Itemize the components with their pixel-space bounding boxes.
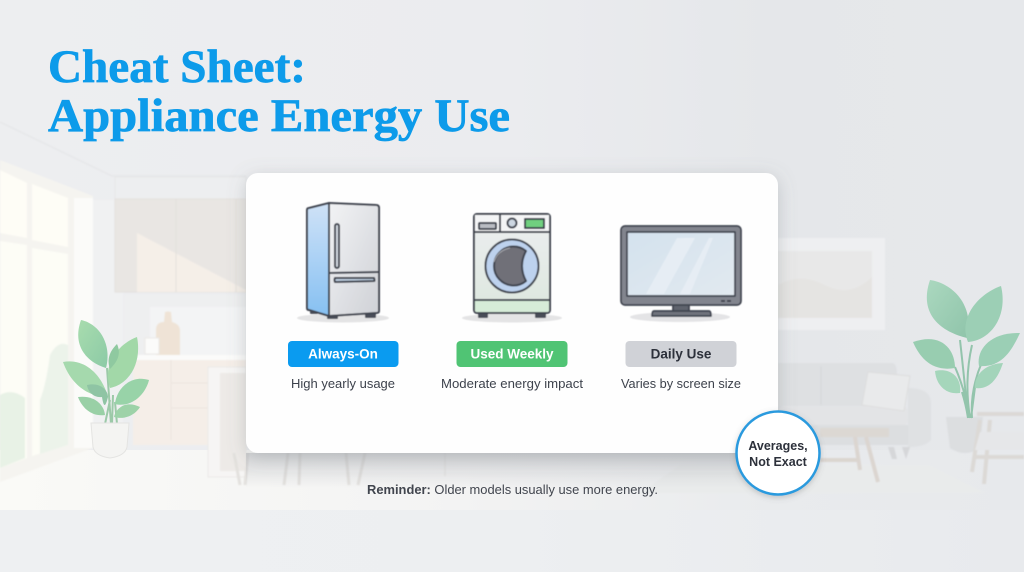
label: daily use badge	[626, 341, 736, 367]
label: used weekly badge	[456, 341, 568, 367]
callout: averages, not exact: Not Exact	[749, 455, 808, 469]
icon: washing machine	[462, 214, 562, 322]
plant: left	[63, 320, 149, 458]
text: always-on caption: High yearly usage	[291, 376, 395, 391]
label: used weekly badge: Used Weekly	[470, 346, 554, 362]
label: always-on badge: Always-On	[308, 346, 378, 362]
pot	[91, 423, 129, 458]
label: daily use badge: Daily Use	[651, 346, 712, 362]
text: used weekly caption: Moderate energy impact	[441, 376, 583, 391]
text: daily use caption: Varies by screen size	[621, 376, 741, 391]
title	[48, 41, 510, 142]
callout: averages, not exact: Averages,	[748, 439, 808, 453]
callout: averages, not exact	[736, 412, 820, 494]
panel: appliance card	[246, 173, 778, 453]
shadow beneath card	[246, 453, 778, 488]
label: always-on badge	[288, 341, 398, 367]
icon: refrigerator	[297, 203, 389, 322]
title line 1: Cheat Sheet:	[48, 41, 306, 93]
text: reminder note: Reminder: Older models usually use more energy.	[367, 483, 658, 497]
title line 2: Appliance Energy Use	[48, 90, 510, 142]
plant: right	[913, 280, 1020, 418]
icon: television	[621, 226, 741, 322]
